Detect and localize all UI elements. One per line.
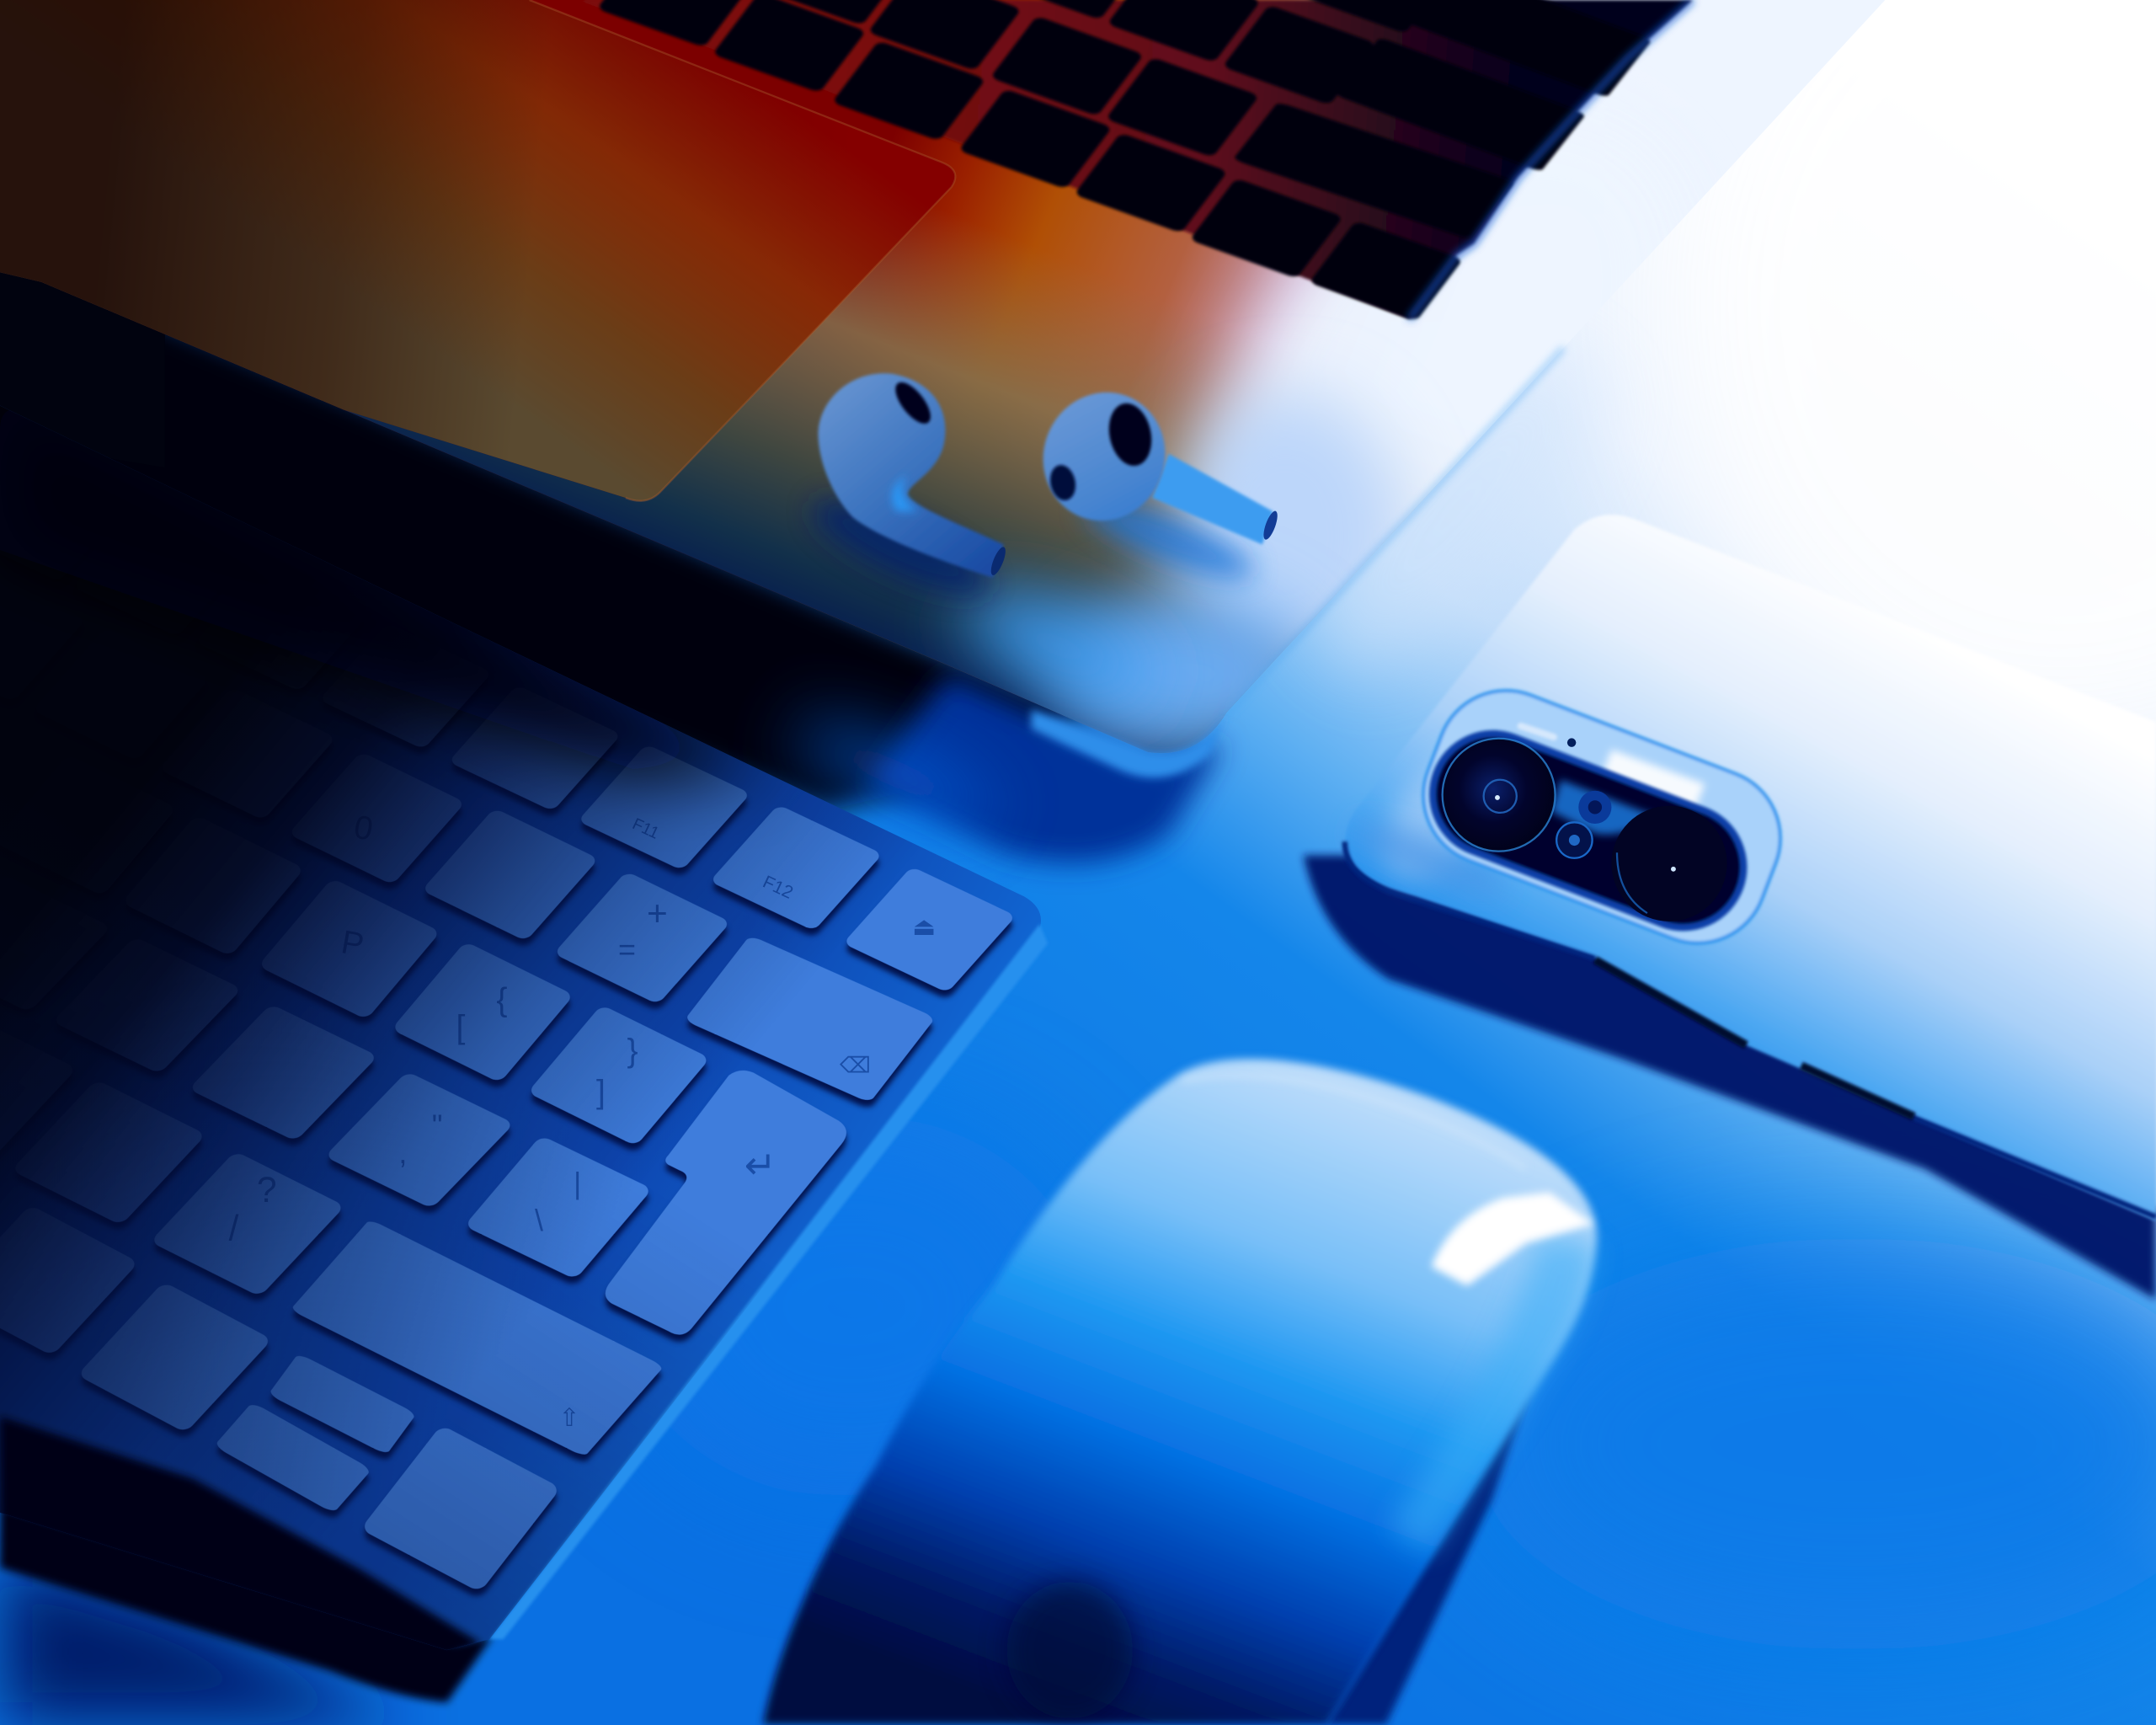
island glare [1595, 750, 1705, 825]
laptop edge seam [1226, 348, 1563, 715]
key legends: ↵ [744, 1144, 776, 1187]
phone side buttons [1595, 960, 1914, 1117]
right light glow [1179, 261, 1481, 618]
key: F11 [578, 744, 750, 870]
key legends: ] [596, 1074, 606, 1110]
key legends: = [618, 932, 636, 967]
key: left option [77, 1282, 272, 1433]
keyboard shadow on desk [0, 1506, 492, 1702]
laptop base [2, 0, 1885, 753]
keyboard side edge [489, 924, 1048, 1639]
key legends: 0 [351, 809, 376, 848]
key: shift [290, 1219, 664, 1457]
module reflection [1551, 780, 1657, 835]
depth lens [1578, 791, 1611, 824]
macro lens [1556, 822, 1593, 858]
keyboard left darkness [0, 385, 1100, 1691]
key: open brace [391, 942, 574, 1083]
key legends: } [627, 1033, 638, 1069]
keycaps [0, 455, 1017, 1593]
key legends: F11 [629, 814, 662, 843]
magic mouse [763, 1059, 1597, 1724]
main lens [1443, 739, 1556, 852]
phone shadow [1304, 856, 2156, 1300]
laptop keyboard blue rim [1409, 0, 1693, 319]
mouse logo shadow [1006, 1582, 1133, 1719]
mouse highlight [1432, 1193, 1593, 1286]
key: close brace [527, 1005, 710, 1146]
key: semicolon [189, 1004, 378, 1141]
laptop shadow on desk [867, 674, 1224, 862]
key: plus [553, 871, 731, 1005]
phone left tint [1364, 727, 1524, 896]
key legends [229, 809, 936, 1432]
key: F12 [709, 804, 883, 931]
key legends: ⏏ [912, 913, 936, 941]
key legends: " [432, 1108, 443, 1143]
key: quote [324, 1071, 515, 1209]
tele lens [1611, 806, 1727, 921]
key legends: \ [535, 1203, 543, 1237]
key legends: + [647, 894, 668, 933]
key legends: ⌫ [840, 1052, 871, 1077]
mouse shadow [1327, 1389, 1529, 1724]
palm rest shading [344, 219, 1460, 753]
key: arrow down [214, 1402, 372, 1514]
earbud inner glow [892, 474, 919, 511]
key legends: P [339, 924, 366, 964]
key: backspace [684, 935, 936, 1103]
phone side edge [1345, 841, 2156, 1217]
external keyboard [0, 385, 1100, 1691]
key legends: F12 [760, 873, 796, 903]
airbud shadows [802, 482, 1261, 613]
key: eject [843, 867, 1017, 993]
key gaps [578, 0, 1693, 319]
phone [1345, 515, 2156, 1221]
key legends: ? [257, 1170, 277, 1210]
key legends: [ [456, 1010, 465, 1046]
flash and mic [1521, 726, 1554, 737]
laptop keyboard [578, 0, 1693, 321]
trackpad edge [530, 0, 955, 501]
icon: right earbud [1025, 375, 1280, 545]
key legends: | [574, 1166, 581, 1200]
key: return [606, 1071, 846, 1335]
key legends: ⇧ [559, 1404, 579, 1432]
laptop keys [597, 0, 1652, 321]
key: question mark [150, 1151, 345, 1297]
key: arrow right [360, 1424, 561, 1593]
key legends: / [229, 1209, 239, 1248]
key legends: { [496, 982, 507, 1018]
keyboard upper dark band [0, 385, 770, 770]
key: arrow up [268, 1354, 417, 1455]
mouse top rim [1182, 1076, 1526, 1169]
mouse right glow [1389, 1237, 1597, 1554]
lens module [1415, 716, 1761, 945]
camera island [1403, 670, 1801, 963]
keyboard bottom dark band [0, 1417, 481, 1657]
phone bottom blue corner [1347, 811, 1513, 908]
dark shadow between laptop and keyboard [0, 248, 1086, 811]
laptop corner blue light [1052, 591, 1313, 756]
icon: left earbud [818, 373, 1008, 578]
laptop front edge [1031, 709, 1226, 777]
key legends: , [398, 1135, 407, 1170]
glow beyond keyboard corner [783, 706, 1004, 841]
laptop trackpad [0, 0, 990, 522]
key: backslash [464, 1135, 653, 1279]
